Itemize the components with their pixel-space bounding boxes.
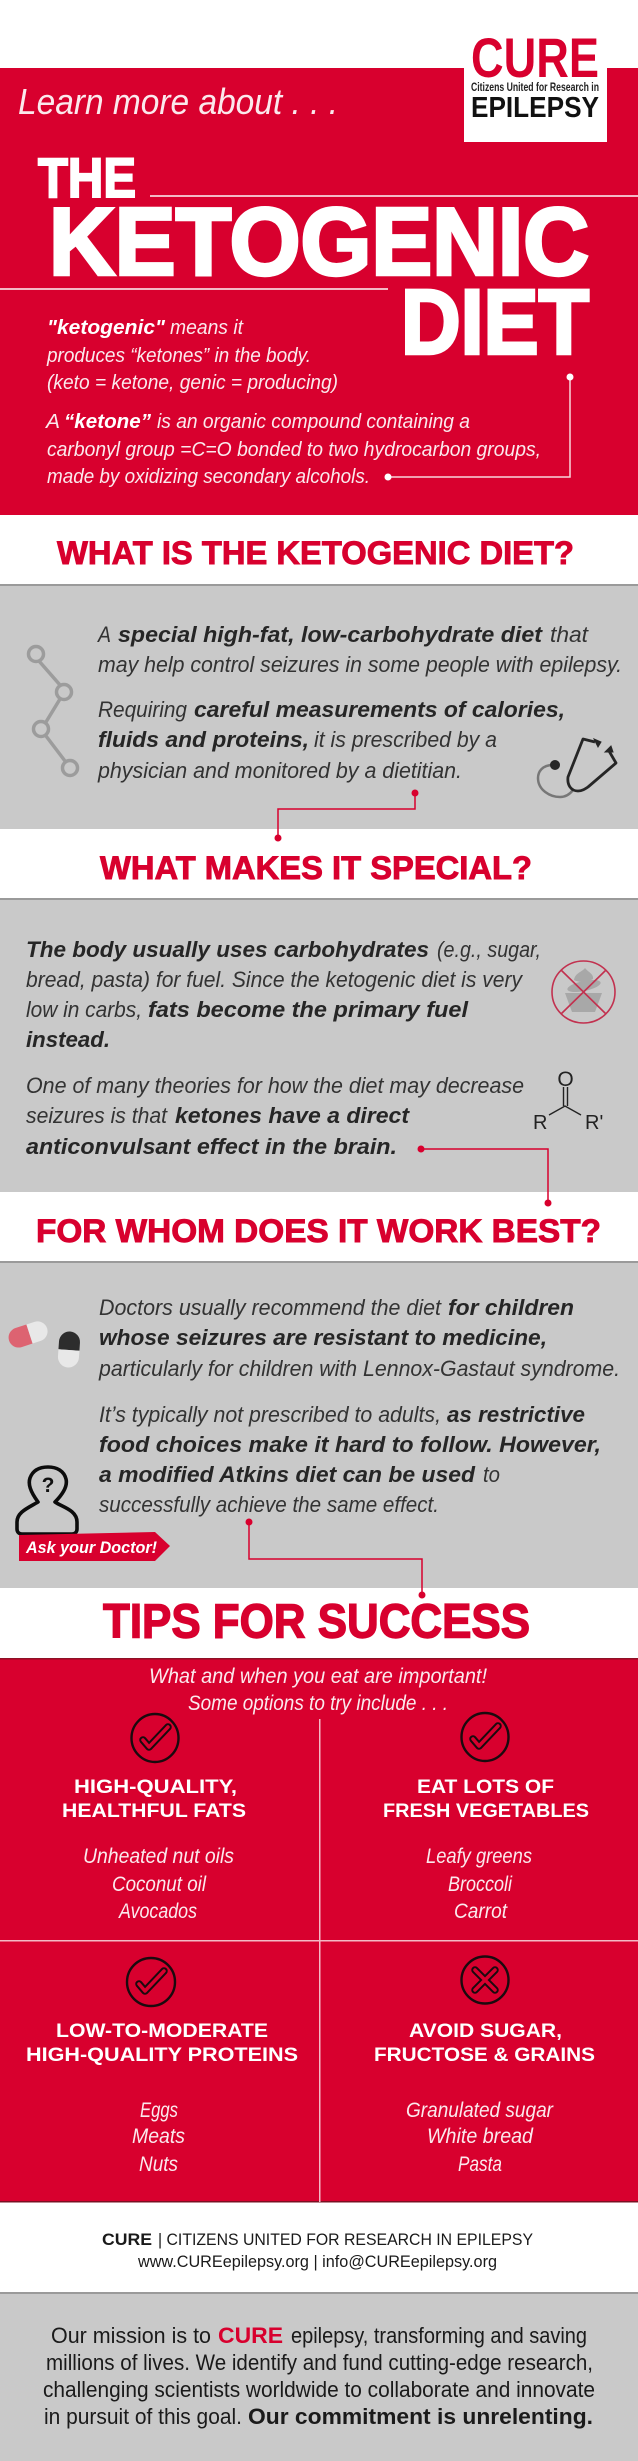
panel: mission statement: in pursuit of this goal. <box>44 2404 242 2429</box>
text block: ketogenic definition: "ketogenic" <box>47 316 165 339</box>
icon: stethoscope <box>538 739 616 797</box>
icon: ketone structure: R' <box>585 1112 603 1134</box>
text block: definition: that <box>550 622 589 647</box>
panel: fresh vegetables <box>383 1713 589 1923</box>
text block: adults <box>99 1402 601 1517</box>
text block: adults: a modified Atkins diet can be used <box>99 1462 476 1487</box>
text block: definition: A <box>96 622 111 647</box>
panel: for whom does it work best <box>0 1261 638 1588</box>
text block: requirements <box>97 697 565 783</box>
arrow: connector to what makes it special <box>274 790 418 842</box>
panel: proteins: HIGH-QUALITY PROTEINS <box>26 2044 298 2066</box>
heading: what makes it special: WHAT MAKES IT SPECIAL? <box>100 850 532 886</box>
panel: healthful fats: Avocados <box>117 1900 197 1923</box>
text block: tips intro <box>149 1665 487 1715</box>
text block: theories: seizures is that <box>26 1103 168 1128</box>
text block: children: for children <box>448 1295 574 1320</box>
heading: what is the ketogenic diet: WHAT IS THE KETOGENIC DIET? <box>57 535 574 571</box>
text block: children: whose seizures are resistant to medicine, <box>99 1325 547 1350</box>
text block: ketogenic definition: (keto = ketone, genic = producing) <box>47 371 338 394</box>
panel: mission statement: millions of lives. We identify and fund cutting-edge research, <box>46 2350 593 2375</box>
title: DIET <box>401 272 589 374</box>
text block: requirements: careful measurements of calories, <box>194 697 565 722</box>
panel: proteins: Eggs <box>140 2099 178 2122</box>
text block: fuel: (e.g., sugar, <box>437 937 541 962</box>
text block: adults: to <box>483 1462 500 1487</box>
text block: adults: It’s typically not prescribed to adults, <box>99 1402 441 1427</box>
text block: requirements: it is prescribed by a <box>314 727 497 752</box>
text block: theories <box>26 1073 524 1159</box>
text block: fuel: The body usually uses carbohydrates <box>26 937 429 962</box>
panel: header <box>0 26 638 515</box>
logo: CURE <box>464 26 607 142</box>
panel: healthful fats: HIGH-QUALITY, <box>74 1776 237 1798</box>
panel: proteins: Nuts <box>139 2153 178 2176</box>
panel: healthful fats: Coconut oil <box>112 1873 207 1896</box>
logo: CURE: EPILEPSY <box>471 92 599 124</box>
panel: proteins: Meats <box>132 2125 185 2148</box>
text block: ketone definition <box>44 410 541 488</box>
text block: ketogenic definition: means it <box>170 316 244 339</box>
footer: organisation contact <box>102 2230 533 2271</box>
icon: person with question mark: ? <box>42 1474 54 1497</box>
panel: avoid sugar: Pasta <box>458 2153 502 2176</box>
text block: ketogenic definition <box>46 316 338 394</box>
text block: theories: ketones have a direct <box>175 1103 411 1128</box>
panel: fresh vegetables: FRESH VEGETABLES <box>383 1800 589 1822</box>
text block: definition: special high-fat, low-carbohydrate diet <box>118 622 544 647</box>
icon: no cupcake <box>552 961 615 1023</box>
arrow: header connector <box>384 374 574 480</box>
panel: what is the ketogenic diet <box>0 584 638 829</box>
title: KETOGENIC <box>49 188 589 296</box>
footer: organisation contact: www.CUREepilepsy.org | info@CUREepilepsy.org <box>137 2252 497 2271</box>
panel: avoid sugar: White bread <box>427 2125 534 2148</box>
panel: avoid sugar <box>374 1956 595 2176</box>
arrow: connector to tips <box>246 1518 426 1598</box>
text block: children <box>98 1295 620 1381</box>
icon: ketone structure <box>533 1068 603 1134</box>
text block: adults: food choices make it hard to follow. However, <box>99 1432 601 1457</box>
text block: ketone definition: made by oxidizing secondary alcohols. <box>47 465 370 488</box>
heading: tips for success: TIPS FOR SUCCESS <box>103 1596 530 1648</box>
panel: healthful fats <box>62 1714 246 1923</box>
footer: organisation contact: CURE <box>102 2230 152 2249</box>
panel: fresh vegetables: EAT LOTS OF <box>417 1776 554 1798</box>
icon: cross <box>462 1956 508 2004</box>
panel: proteins: LOW-TO-MODERATE <box>56 2020 268 2042</box>
text block: ketone definition: “ketone” <box>64 410 152 433</box>
footer: organisation contact: | CITIZENS UNITED FOR RESEARCH IN EPILEPSY <box>158 2230 533 2249</box>
text block: tips intro: What and when you eat are important! <box>149 1665 487 1688</box>
title <box>38 146 589 374</box>
text block: requirements: fluids and proteins, <box>98 727 309 752</box>
icon: check <box>462 1713 508 1761</box>
text block: children: particularly for children with Lennox-Gastaut syndrome. <box>98 1356 620 1381</box>
text block: definition: may help control seizures in some people with epilepsy. <box>98 652 622 677</box>
panel: mission statement: epilepsy, transforming and saving <box>291 2323 587 2348</box>
text block: ketogenic definition: produces “ketones” in the body. <box>46 344 311 367</box>
title: THE <box>38 146 136 209</box>
panel: mission statement <box>0 2292 638 2461</box>
panel: mission statement: Our commitment is unrelenting. <box>248 2404 593 2429</box>
panel: avoid sugar: AVOID SUGAR, <box>409 2020 562 2042</box>
text block: adults: as restrictive <box>447 1402 585 1427</box>
text block: fuel <box>26 937 541 1052</box>
icon: ketone structure: R <box>533 1112 547 1134</box>
panel: proteins <box>26 1958 298 2176</box>
text block: requirements: Requiring <box>98 697 188 722</box>
panel: fresh vegetables: Carrot <box>454 1900 508 1923</box>
icon: molecule chain <box>28 646 78 776</box>
panel: healthful fats: Unheated nut oils <box>83 1845 234 1868</box>
logo: CURE: Citizens United for Research in <box>471 82 599 94</box>
text block: requirements: physician and monitored by a dietitian. <box>97 758 462 783</box>
text block: tips intro: Some options to try include . . . <box>188 1692 448 1715</box>
callout: ask your doctor <box>19 1532 170 1561</box>
panel: avoid sugar: FRUCTOSE & GRAINS <box>374 2044 595 2066</box>
text block: theories: anticonvulsant effect in the brain. <box>26 1134 397 1159</box>
panel: mission statement: CURE <box>218 2323 283 2348</box>
text block: ketone definition: is an organic compound containing a <box>157 410 470 433</box>
heading: for whom does it work best: FOR WHOM DOES IT WORK BEST? <box>36 1213 601 1249</box>
icon: check <box>132 1714 178 1762</box>
logo: CURE: CURE <box>471 26 599 89</box>
panel: fresh vegetables: Broccoli <box>448 1873 513 1896</box>
icon: pills <box>6 1319 81 1368</box>
text block: theories: One of many theories for how the diet may decrease <box>26 1073 524 1098</box>
panel: tips for success <box>0 1658 638 2202</box>
text block: definition <box>96 622 622 677</box>
panel: healthful fats: HEALTHFUL FATS <box>62 1800 246 1822</box>
panel: what makes it special <box>0 898 638 1192</box>
panel: avoid sugar: Granulated sugar <box>406 2099 554 2122</box>
text block: fuel: bread, pasta) for fuel. Since the ketogenic diet is very <box>26 967 524 992</box>
arrow: connector to for whom <box>418 1146 552 1206</box>
text block: ketone definition: A <box>44 410 60 433</box>
text block: fuel: instead. <box>26 1027 110 1052</box>
text block: fuel: low in carbs, <box>26 997 142 1022</box>
icon: ketone structure: O <box>557 1068 574 1091</box>
panel: fresh vegetables: Leafy greens <box>426 1845 532 1868</box>
icon: check <box>127 1958 175 2006</box>
callout: ask your doctor: Ask your Doctor! <box>25 1538 157 1557</box>
text block: children: Doctors usually recommend the diet <box>99 1295 442 1320</box>
panel: mission statement: challenging scientists worldwide to collaborate and innovate <box>43 2377 595 2402</box>
text block: ketone definition: carbonyl group =C=O bonded to two hydrocarbon groups, <box>47 438 541 461</box>
text block: fuel: fats become the primary fuel <box>148 997 469 1022</box>
panel: mission statement: Our mission is to <box>51 2323 211 2348</box>
icon: person with question mark <box>17 1467 77 1534</box>
intro text: Learn more about . . . <box>18 81 338 122</box>
text block: adults: successfully achieve the same effect. <box>99 1492 439 1517</box>
